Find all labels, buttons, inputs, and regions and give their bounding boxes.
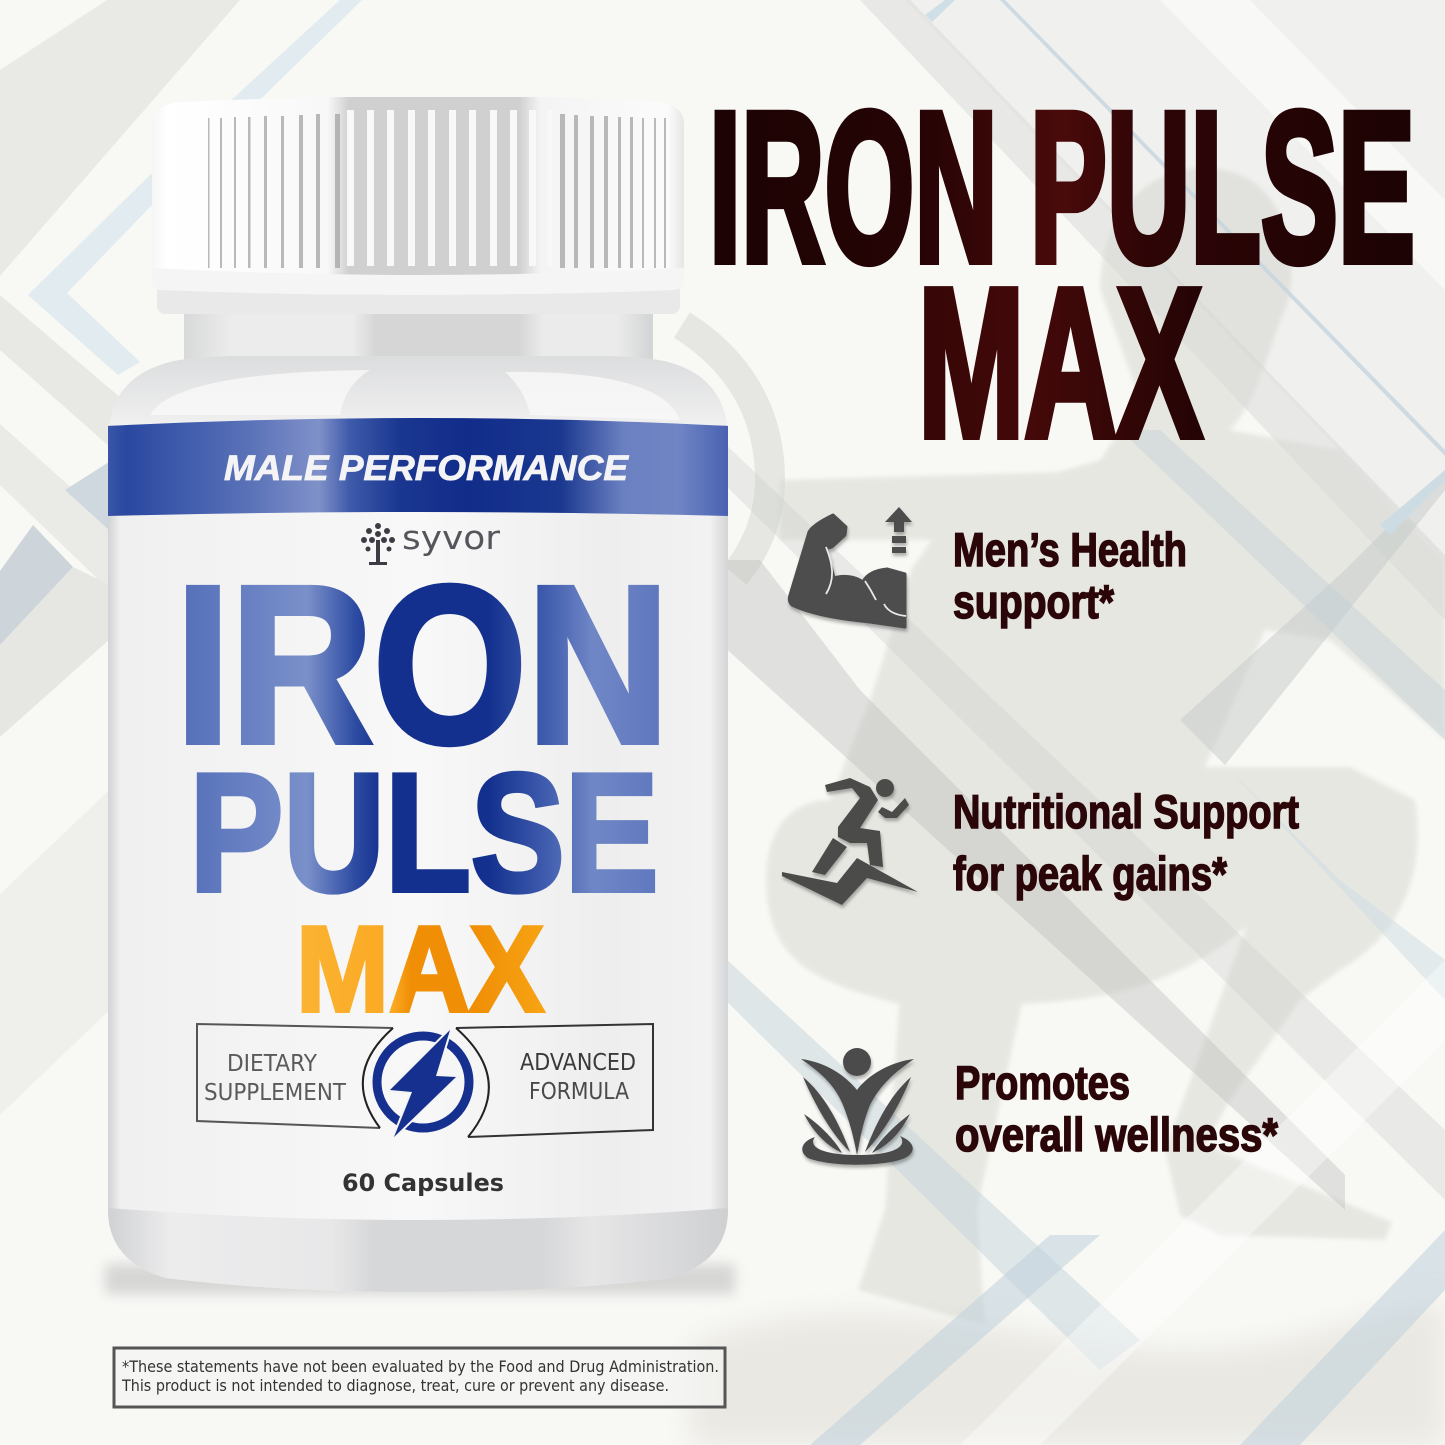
- neck ring: [157, 284, 680, 314]
- bottle shadow: [105, 1264, 735, 1294]
- benefit text: Nutritional Support: [953, 785, 1299, 838]
- background: weight plate arc: [682, 325, 770, 575]
- background: squatting athlete silhouette: [766, 168, 1445, 1325]
- badge: SUPPLEMENT: [204, 1080, 347, 1106]
- headline: [709, 68, 1415, 481]
- disclaimer: This product is not intended to diagnose, treat, cure or prevent any disease.: [121, 1376, 669, 1395]
- product name IRON: IRON: [176, 540, 670, 790]
- icon: tree: [361, 523, 395, 565]
- badge text right: ADVANCED: [520, 1050, 636, 1076]
- background: floor: [690, 1300, 1445, 1445]
- benefit: nutritional support: [782, 778, 1299, 905]
- badge: FORMULA: [529, 1079, 629, 1105]
- benefit: men's health: support*: [953, 575, 1115, 628]
- disclaimer: *These statements have not been evaluated by the Food and Drug Administration.: [122, 1357, 719, 1376]
- badge: [197, 1024, 653, 1137]
- icon: lightning bolt: [377, 1030, 469, 1137]
- product name PULSE: PULSE: [190, 738, 658, 926]
- disclaimer: [114, 1348, 725, 1407]
- icon: runner: [782, 778, 918, 905]
- benefit text: Promotes: [955, 1056, 1130, 1109]
- benefit: men's health: [789, 507, 1187, 628]
- band text: MALE PERFORMANCE: [224, 449, 630, 488]
- bottle cap: [152, 97, 684, 295]
- benefit: nutritional support: for peak gains*: [953, 847, 1228, 900]
- benefit: overall wellness: overall wellness*: [955, 1108, 1279, 1161]
- background: diagonal bands: [700, 0, 1445, 1445]
- benefit text: Men’s Health: [953, 523, 1187, 576]
- label band: [108, 418, 728, 516]
- bottle neck: [184, 290, 653, 365]
- background: left geometric shapes: [0, 0, 362, 1115]
- background: top right tone: [905, 0, 1445, 560]
- icon: wellness figure: [801, 1048, 914, 1165]
- badge text left: DIETARY: [227, 1051, 318, 1077]
- cap ridges: [208, 114, 666, 268]
- benefit: overall wellness: [801, 1048, 1279, 1165]
- brand logo: [361, 518, 500, 565]
- icon: flexed arm: [789, 507, 912, 627]
- shoulder highlights: [150, 370, 370, 415]
- bottle: [105, 97, 735, 1294]
- bottle base reflection: [108, 1208, 728, 1292]
- brand name: syvor: [402, 518, 500, 557]
- headline: MAX: [918, 244, 1202, 481]
- product name MAX: MAX: [296, 901, 544, 1037]
- capsule count: 60 Capsules: [342, 1169, 504, 1197]
- bottle body: [108, 356, 728, 1292]
